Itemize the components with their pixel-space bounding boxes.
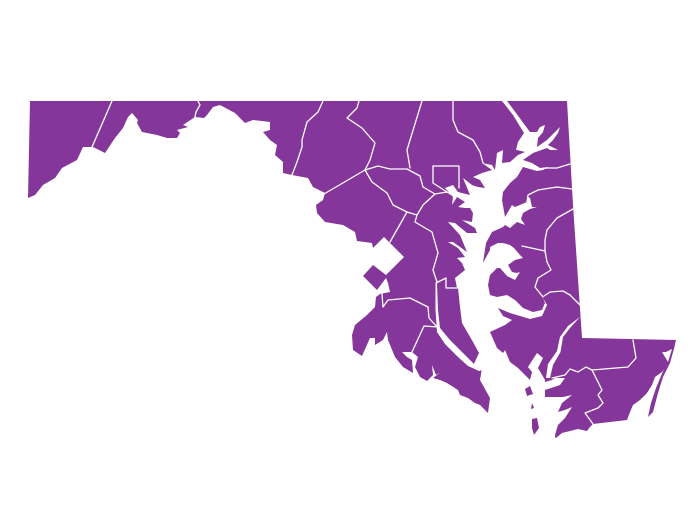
state silhouette (28, 101, 676, 445)
barrier island (648, 345, 675, 417)
rivers (436, 283, 580, 378)
Chesapeake Bay (445, 101, 572, 460)
islands (525, 386, 539, 435)
county lines (92, 101, 636, 424)
coastal bay (662, 349, 672, 362)
